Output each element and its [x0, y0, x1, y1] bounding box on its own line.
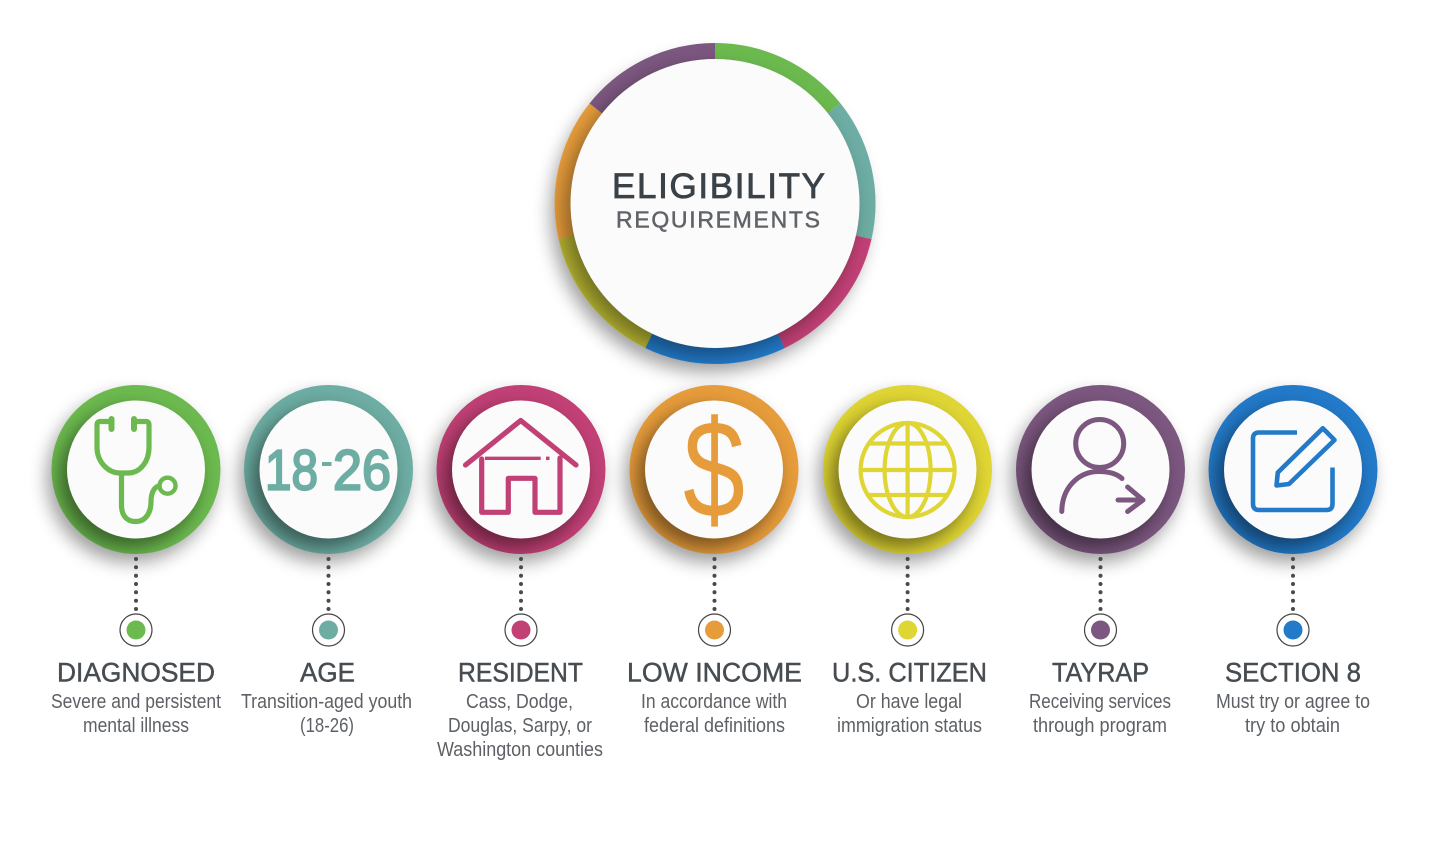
text block: diagnosed: DIAGNOSED — [57, 658, 215, 688]
central hub: eligibility requirements — [551, 51, 868, 372]
text block: age: Transition-aged youth — [241, 691, 412, 713]
text block: tayrap: Receiving services — [1029, 691, 1171, 713]
badge: u.s. citizen — [818, 385, 992, 562]
text block: resident: RESIDENT — [458, 658, 583, 688]
icon: age range number: 18 — [265, 438, 318, 502]
text block: u.s. citizen: Or have legal — [856, 691, 962, 713]
text block: age: (18-26) — [300, 715, 354, 737]
text block: u.s. citizen: U.S. CITIZEN — [832, 658, 987, 688]
text block: tayrap — [1029, 658, 1171, 737]
icon: stethoscope — [97, 419, 176, 522]
text block: low income — [627, 658, 802, 737]
icon: person with arrow — [1062, 420, 1143, 512]
text block: age — [241, 658, 412, 737]
text block: resident: Cass, Dodge, — [466, 691, 573, 713]
icon: house — [466, 420, 576, 512]
icon: age range number — [265, 438, 391, 502]
subtitle: REQUIREMENTS — [616, 206, 820, 232]
text block: section 8 — [1216, 658, 1370, 737]
text block: age: AGE — [300, 658, 355, 688]
text block: u.s. citizen: immigration status — [837, 715, 982, 737]
text block: section 8: SECTION 8 — [1225, 658, 1361, 688]
text block: u.s. citizen — [832, 658, 987, 737]
title: ELIGIBILITY — [612, 167, 825, 206]
connector: dotted lines and node markers — [120, 557, 1309, 646]
text block: low income: LOW INCOME — [627, 658, 802, 688]
badge: low income — [625, 385, 798, 562]
text block: low income: federal definitions — [644, 715, 785, 737]
text block: low income: In accordance with — [641, 691, 787, 713]
icon: note with pencil — [1253, 428, 1334, 510]
text block: diagnosed: Severe and persistent — [51, 691, 221, 713]
text block: diagnosed: mental illness — [83, 715, 189, 737]
icon: age range number: 26 — [333, 438, 391, 502]
badge: diagnosed — [47, 385, 220, 562]
text block: section 8: try to obtain — [1245, 715, 1340, 737]
text block: section 8: Must try or agree to — [1216, 691, 1370, 713]
text block: resident: Douglas, Sarpy, or — [448, 715, 592, 737]
badge: resident — [432, 385, 606, 562]
text block: diagnosed — [51, 658, 221, 737]
text block: tayrap: through program — [1033, 715, 1167, 737]
text block: tayrap: TAYRAP — [1052, 658, 1149, 688]
text block: resident — [437, 658, 603, 761]
icon: dollar sign: $ — [683, 391, 745, 547]
icon: globe — [861, 423, 955, 517]
badge: age — [240, 385, 413, 562]
segmented colour ring — [562, 51, 868, 356]
text block: resident: Washington counties — [437, 739, 603, 761]
badge: tayrap — [1012, 385, 1185, 562]
badge: section 8 — [1204, 385, 1378, 562]
